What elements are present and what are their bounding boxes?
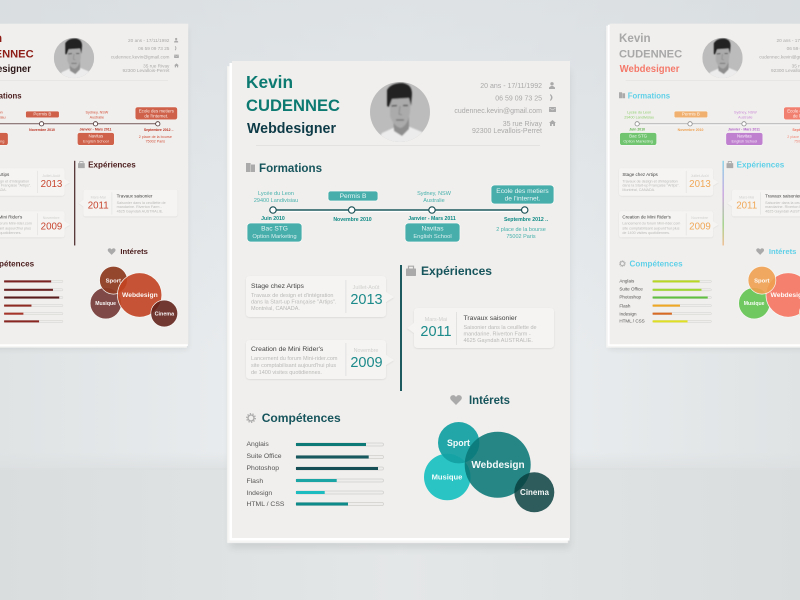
experience card 2009: site comptabilisant aujourd'hui plus [622,226,680,230]
education timeline: English School [83,139,109,144]
profile photo [702,38,743,79]
education timeline: Option Marketing [252,234,297,240]
skill bars [246,441,384,508]
background wall [0,0,800,468]
name heading: Webdesigner [620,64,680,75]
education timeline: Novembre 2010 [29,128,55,132]
experience card 2009: 2009 [350,355,383,371]
heading: Expériences: Expériences [737,161,785,170]
name heading: CUDENNEC [619,48,682,60]
interest bubbles [739,266,800,327]
experience card 2011: Travaux saisonier [117,194,153,199]
education timeline: Ecole des metiers [496,188,549,195]
experience card 2013: 2013 [689,179,711,190]
education timeline: Navitas [88,134,104,139]
vertical divider [722,161,724,245]
contact details: 92300 Levallois-Perret [123,68,170,73]
skill bars: Photoshop [619,295,642,300]
contact details [454,82,556,135]
education timeline: Sydney, NSW [734,111,757,115]
profile photo [54,38,94,79]
experience card 2011: Mars-Mai [425,317,447,323]
experience card 2013: 2013 [41,179,62,190]
education timeline: Option Marketing [623,139,653,144]
interest bubbles: Sport [447,438,470,448]
experience card 2009: de 1400 visites quotidiennes. [622,231,670,235]
contact details: 20 ans - 17/11/1992 [480,83,542,90]
experience card 2013 [246,276,394,317]
education timeline: Novembre 2010 [333,217,372,223]
experience card 2011: 2011 [88,200,109,211]
heading: Intérets: Intérets [120,247,148,256]
contact details: 92300 Levallois-Perret [472,128,542,135]
education timeline: 29400 Landivisiau [254,198,298,204]
experience card 2013: dans la Start-up Française "Artips". [251,300,337,306]
skill bars: HTML / CSS [246,501,285,508]
education timeline: Lycée du Leon [258,191,294,197]
background floor [0,468,800,600]
skill bars: Indesign [246,490,272,497]
education timeline: 2 place de la bourse [139,135,172,139]
experience card 2011: 4625 Gayndah AUSTRALIE. [117,210,163,214]
contact details [111,38,179,73]
heading: Intérets: Intérets [769,247,796,256]
contact details: cudennec.kevin@gmail.com [454,108,542,115]
skill bars [0,278,63,324]
interest bubbles: Webdesign [122,292,158,299]
experience card 2011 [727,190,800,217]
skill bars: Flash [619,303,631,308]
contact details: 35 rue Rivay [503,121,542,128]
resume page: pastel variant (right) [606,24,800,350]
experience card 2011: 4625 Gayndah AUSTRALIE. [464,338,533,344]
name heading: Kevin [619,32,651,45]
name heading [0,32,34,75]
interest bubbles: Musique [95,301,116,307]
skill bars: Anglais [246,441,269,448]
education timeline: Australie [738,115,753,119]
education timeline: Navitas [737,134,752,139]
skill bars [619,278,711,324]
experience card 2011: Travaux saisonier [464,315,518,322]
education timeline: Sydney, NSW [417,191,452,197]
experience card 2009: site comptabilisant aujourd'hui plus [251,363,336,369]
name heading [246,72,340,137]
experience card 2009: 2009 [689,221,711,232]
experience card 2011: Mars-Mai [739,195,754,199]
interest bubbles [424,422,554,512]
experience card 2013: Montréal, CANADA. [251,306,300,312]
heading: Intérets [108,247,148,256]
contact details [759,38,800,73]
education timeline: de l'internet. [144,113,168,118]
heading: Compétences: Compétences [262,411,341,425]
interest bubbles: Musique [744,301,765,307]
interest bubbles [90,266,178,327]
education timeline: 2 place de la bourse [496,227,546,233]
skill bars: Suite Office [619,286,643,291]
skill bars: Photoshop [246,465,279,472]
experience card 2011: 2011 [420,324,452,340]
experience card 2013: 2013 [350,292,383,308]
contact details: cudennec.kevin@gmail.com [111,55,170,60]
education timeline: Janvier - Mars 2011 [728,128,760,132]
experience card 2009: de 1400 visites quotidiennes. [251,370,322,376]
heading: Intérets [450,395,510,407]
education timeline: de l'internet. [505,196,541,202]
interest bubbles: Cinema [520,488,549,497]
experience card 2009: Creation de Mini Rider's [622,215,671,220]
education timeline: Bac STG [261,226,288,232]
experience card 2011: mandarine. Riverton Farm - [117,205,163,209]
heading: Formations: Formations [259,161,322,175]
education timeline: Janvier - Mars 2011 [80,128,112,132]
education timeline: Septembre 2012 .. [144,128,174,132]
contact details: 06 59 09 73 25 [495,96,542,102]
heading: Intérets [756,247,796,256]
experience card 2009: Novembre [691,216,708,220]
name heading [619,32,682,75]
experience card 2011: Saisonier dans la ceuillette de [117,201,166,205]
education timeline: Septembre 2012 .. [504,217,549,223]
skill bars: Indesign [619,311,637,316]
heading: Formations: Formations [628,91,670,100]
education timeline: 75002 Paris [145,140,165,144]
experience card 2013: Juillet-Août [691,174,709,178]
horizon shading [0,452,800,470]
experience card 2009: Lancement du forum Mini-rider.com [622,222,680,226]
skill bars: Suite Office [246,453,282,460]
skill bars: Flash [246,478,263,485]
interest bubbles: Musique [432,472,462,482]
contact details: 06 59 09 73 25 [138,46,170,51]
education timeline: Juin 2010 [261,216,285,222]
education timeline: Permis B [33,112,51,117]
experience card 2011: Saisonier dans la ceuillette de [464,325,537,331]
wall vertical shading [0,0,800,468]
contact details: 20 ans - 17/11/1992 [128,38,170,43]
education timeline: English School [732,139,757,144]
education timeline: Bac STG [629,134,648,139]
experience card 2009 [619,211,718,237]
education timeline: 29400 Landivisiau [624,115,654,119]
heading: Expériences: Expériences [88,161,136,170]
education timeline: Sydney, NSW [86,111,109,115]
experience card 2009: Novembre [354,348,378,354]
skill bars: Anglais [619,278,635,283]
education timeline: Permis B [682,112,700,117]
experience card 2011: Travaux saisonier [765,194,800,199]
experience card 2013: Stage chez Artips [251,283,304,290]
experience card 2009: Creation de Mini Rider's [251,346,324,353]
experience card 2009: 2009 [41,221,62,232]
experience card 2011: mandarine. Riverton Farm - [464,332,531,338]
experience card 2013: Travaux de design et d'intégration [251,293,333,299]
interest bubbles: Sport [754,278,770,284]
experience card 2011 [79,190,177,217]
education timeline [247,185,554,242]
education timeline: English School [413,234,452,240]
experience card 2009 [246,340,394,379]
experience card 2013: Travaux de design et d'intégration [622,179,678,183]
heading: Compétences: Compétences [630,259,683,268]
name heading: Webdesigner [247,121,336,137]
education timeline: Novembre 2010 [678,128,704,132]
interest bubbles: Cinema [155,311,175,317]
experience card 2011 [407,308,554,348]
experience card 2013 [0,168,70,196]
skill bars: HTML / CSS [619,319,645,324]
education timeline: Juin 2010 [629,128,645,132]
experience card 2009: Novembre [43,216,59,220]
name heading: Kevin [246,72,293,92]
name heading: CUDENNEC [246,96,340,115]
education timeline: Australie [423,198,445,204]
education timeline: Australie [90,115,104,119]
experience card 2011: Mars-Mai [91,195,106,199]
experience card 2009: Lancement du forum Mini-rider.com [251,356,338,362]
education timeline: Navitas [422,226,444,232]
education timeline: Permis B [340,193,367,200]
experience card 2013: dans la Start-up Française "Artips". [622,184,680,188]
vertical divider [400,265,402,391]
interest bubbles: Webdesign [471,460,525,471]
resume page: teal variant (center) [227,61,570,548]
experience card 2013: Montréal, CANADA. [622,188,655,192]
contact details: 35 rue Rivay [143,63,170,68]
heading: Intérets: Intérets [469,395,510,407]
experience card 2009 [0,211,70,237]
heading: Expériences: Expériences [421,264,492,278]
resume page: red variant (left) [0,24,188,350]
experience card 2013: Juillet-Août [42,174,60,178]
education timeline: Lycée du Leon [627,111,651,115]
education timeline [0,107,177,145]
experience card 2011: 2011 [736,200,757,211]
education timeline: Janvier - Mars 2011 [408,216,456,222]
profile photo [370,82,430,143]
education timeline: Ecole des metiers [139,108,175,113]
education timeline [620,107,800,145]
interest bubbles: Sport [106,278,121,284]
education timeline: 75002 Paris [506,234,536,240]
vertical divider [74,161,75,245]
experience card 2013: Stage chez Artips [622,172,658,177]
experience card 2013: Juillet-Août [353,285,380,291]
experience card 2013 [619,168,718,196]
